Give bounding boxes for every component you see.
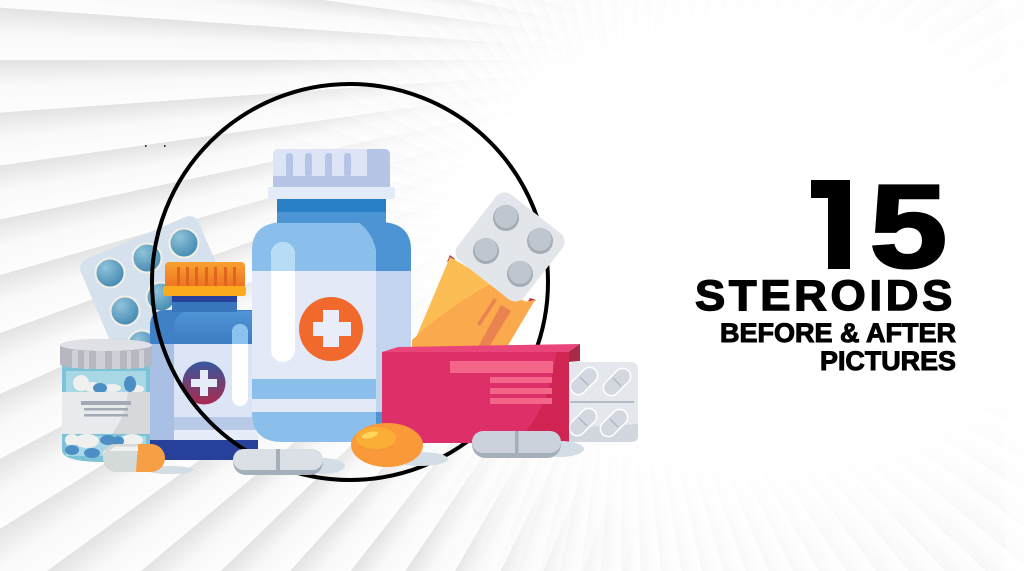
icon: blue blister pack [77, 213, 253, 401]
pill shadows [147, 441, 584, 474]
circle outline [152, 84, 548, 480]
subtitle: before and after: BEFORE & AFTER [720, 318, 956, 348]
reshaping of the digit 1 [790, 170, 871, 273]
icon: small blue bottle [150, 262, 258, 460]
background: wide grey rays [0, 0, 554, 571]
icon: white tablet right [472, 431, 561, 458]
subtitle: pictures: PICTURES [820, 346, 956, 376]
icon: white tablet left [233, 449, 323, 475]
icon: orange oval pill [351, 423, 423, 467]
title: STEROIDS: STEROIDS [695, 272, 956, 320]
icon: orange sachet [412, 255, 536, 347]
icon: pill jar [60, 339, 152, 462]
specks [145, 145, 166, 147]
icon: large blue bottle [252, 149, 411, 442]
icon: orange capsule [103, 444, 165, 472]
icon: silver blister pack [451, 188, 569, 306]
title: 15: 15 [793, 161, 947, 293]
icon: red medicine box [382, 344, 580, 443]
icon: white capsule blister [566, 362, 638, 442]
